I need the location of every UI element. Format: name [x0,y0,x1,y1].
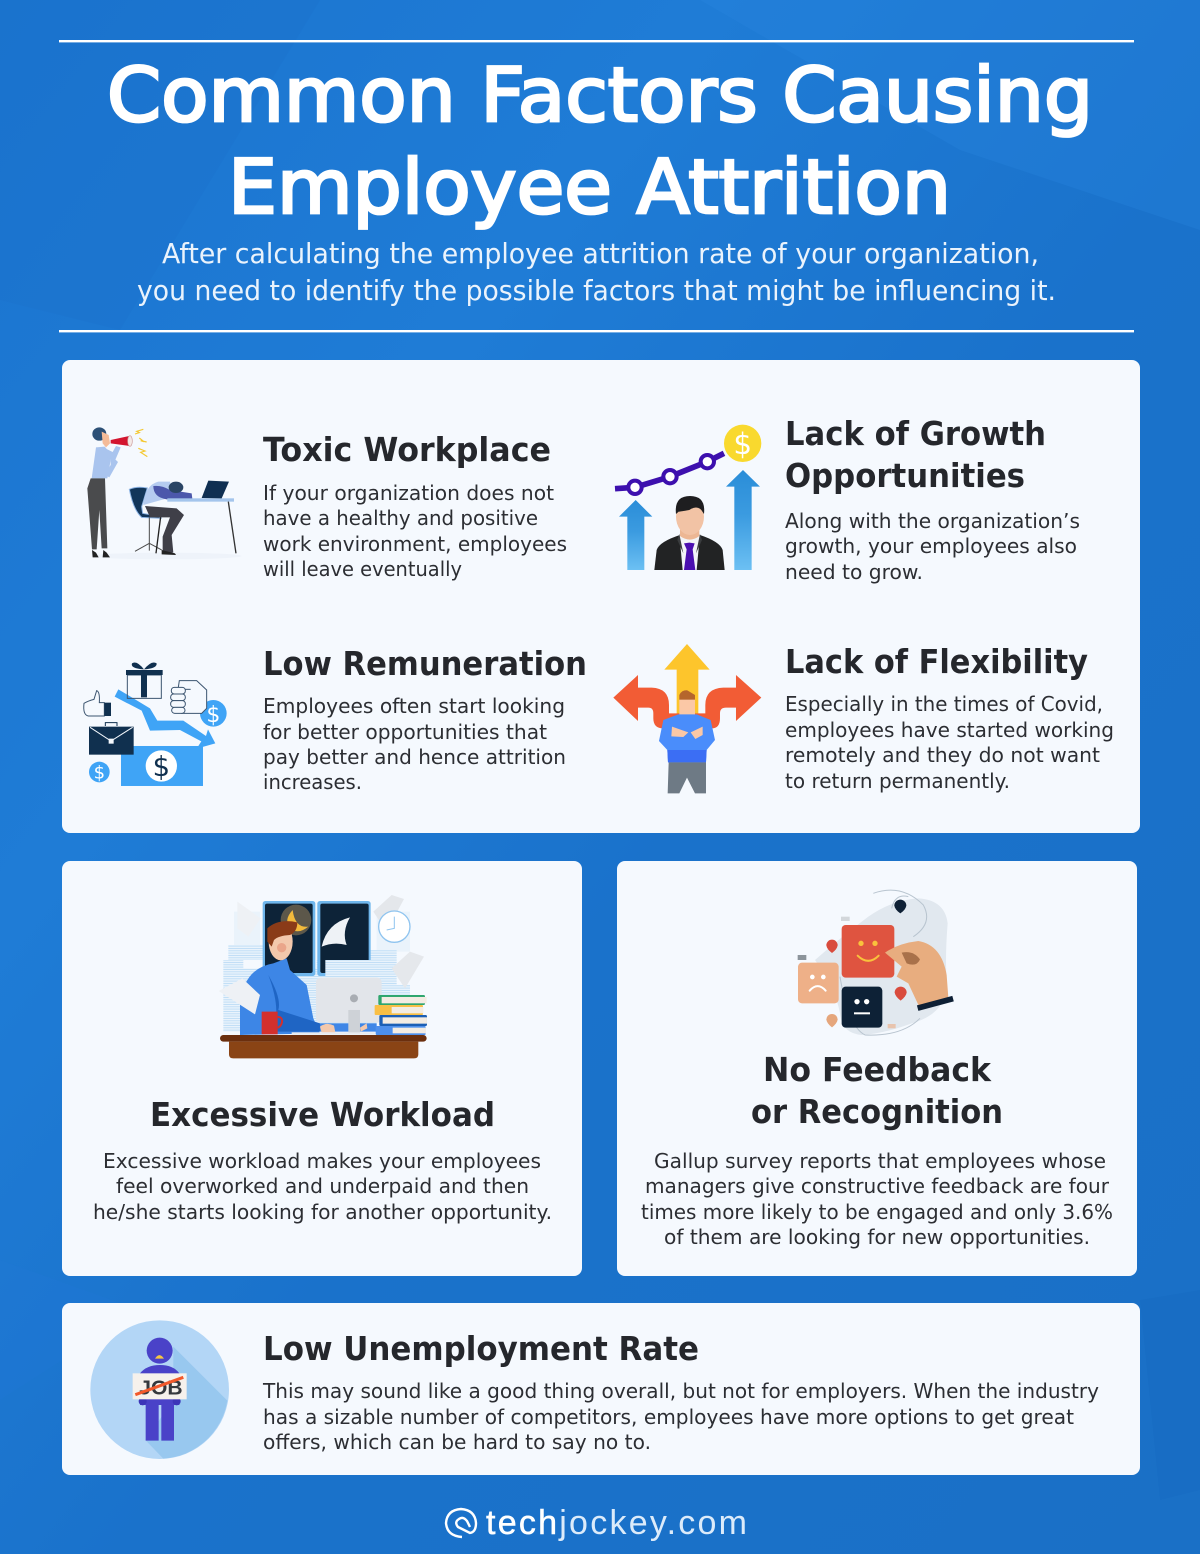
heading: low unemployment rate: Low Unemployment Rate [263,1330,699,1368]
text: toxic workplace: have a healthy and positive [263,506,538,530]
illustration: falling pay [84,662,227,786]
illustration: falling pay: $ [206,703,220,728]
text: lack of flexibility [785,692,1114,793]
text: low unemployment rate [262,1379,1099,1454]
panel: no feedback or recognition [617,861,1137,1276]
heading: no feedback or recognition: No Feedback [763,1051,992,1089]
heading: no feedback or recognition: or Recognition [751,1093,1003,1131]
heading: no feedback or recognition [751,1051,1003,1131]
text: no feedback or recognition: of them are looking for new opportunities. [664,1225,1090,1249]
text: low unemployment rate: This may sound like a good thing overall, but not for employers. When the industry [262,1379,1099,1403]
title [107,51,1093,231]
text: lack of growth opportunities [785,509,1080,584]
text: low unemployment rate: offers, which can be hard to say no to. [263,1430,651,1454]
text: lack of flexibility: to return permanently. [785,769,1010,793]
text: lack of growth opportunities: growth, your employees also [785,534,1077,558]
heading: lack of flexibility: Lack of Flexibility [785,643,1088,681]
text: low remuneration [263,694,566,794]
illustration: falling pay: $ [94,763,105,784]
illustration: man and three direction arrows [613,644,761,793]
illustration: figure holding crossed-out job sign: JOB [139,1378,183,1400]
text: lack of flexibility: remotely and they do not want [785,743,1100,767]
text: low remuneration: increases. [263,770,362,794]
panel: low unemployment rate [62,1303,1140,1475]
text: toxic workplace: work environment, employees [263,532,567,556]
illustration: figure holding crossed-out job sign [90,1320,229,1459]
text: lack of growth opportunities: Along with the organization’s [785,509,1080,533]
text: excessive workload: he/she starts looking for another opportunity. [93,1200,552,1224]
text: no feedback or recognition [641,1149,1113,1249]
illustration: growth chart and businessman: $ [733,427,752,461]
icon: techjockey at-sign [446,1509,476,1537]
illustration: manager shouting at tired employee [87,427,242,559]
text: excessive workload: Excessive workload makes your employees [103,1149,541,1173]
subtitle: After calculating the employee attrition rate of your organization, [162,237,1039,270]
heading: lack of growth opportunities: Opportunities [785,457,1025,495]
text: lack of flexibility: Especially in the times of Covid, [785,692,1103,716]
panel: four factors [62,360,1140,833]
text: low remuneration: Employees often start looking [263,694,565,718]
illustration: overworked man at desk [219,895,427,1058]
text: no feedback or recognition: Gallup survey reports that employees whose [654,1149,1106,1173]
text: toxic workplace: will leave eventually [263,557,462,581]
wordmark: techjockey.com [486,1504,747,1542]
text: low remuneration: for better opportunities that [263,720,547,744]
text: lack of growth opportunities: need to grow. [785,560,923,584]
title: Employee Attrition [228,143,951,231]
text: no feedback or recognition: managers give constructive feedback are four [645,1174,1110,1198]
heading: toxic workplace: Toxic Workplace [263,431,551,469]
footer logo: techjockey.com [446,1504,747,1542]
header rule top [59,40,1134,42]
illustration: emoji feedback cards and hand [798,890,954,1035]
illustration: falling pay: $ [153,752,170,783]
subtitle: you need to identify the possible factors that might be influencing it. [137,274,1056,307]
text: toxic workplace [263,481,567,581]
heading: low remuneration: Low Remuneration [263,645,587,683]
panel: excessive workload [62,861,582,1276]
title: Common Factors Causing [107,51,1093,139]
heading: lack of growth opportunities: Lack of Growth [785,415,1046,453]
header rule bottom [59,330,1134,332]
text: lack of flexibility: employees have started working [785,718,1114,742]
text: toxic workplace: If your organization does not [263,481,554,505]
illustration: growth chart and businessman [615,425,761,570]
heading: excessive workload: Excessive Workload [150,1096,495,1134]
subtitle [137,237,1056,307]
text: low remuneration: pay better and hence attrition [263,745,566,769]
text: low unemployment rate: has a sizable number of competitors, employees have more options to get great [263,1405,1074,1429]
text: no feedback or recognition: times more likely to be engaged and only 3.6% [641,1200,1113,1224]
heading: lack of growth opportunities [785,415,1046,495]
text: excessive workload [93,1149,552,1224]
text: excessive workload: feel overworked and underpaid and then [116,1174,529,1198]
